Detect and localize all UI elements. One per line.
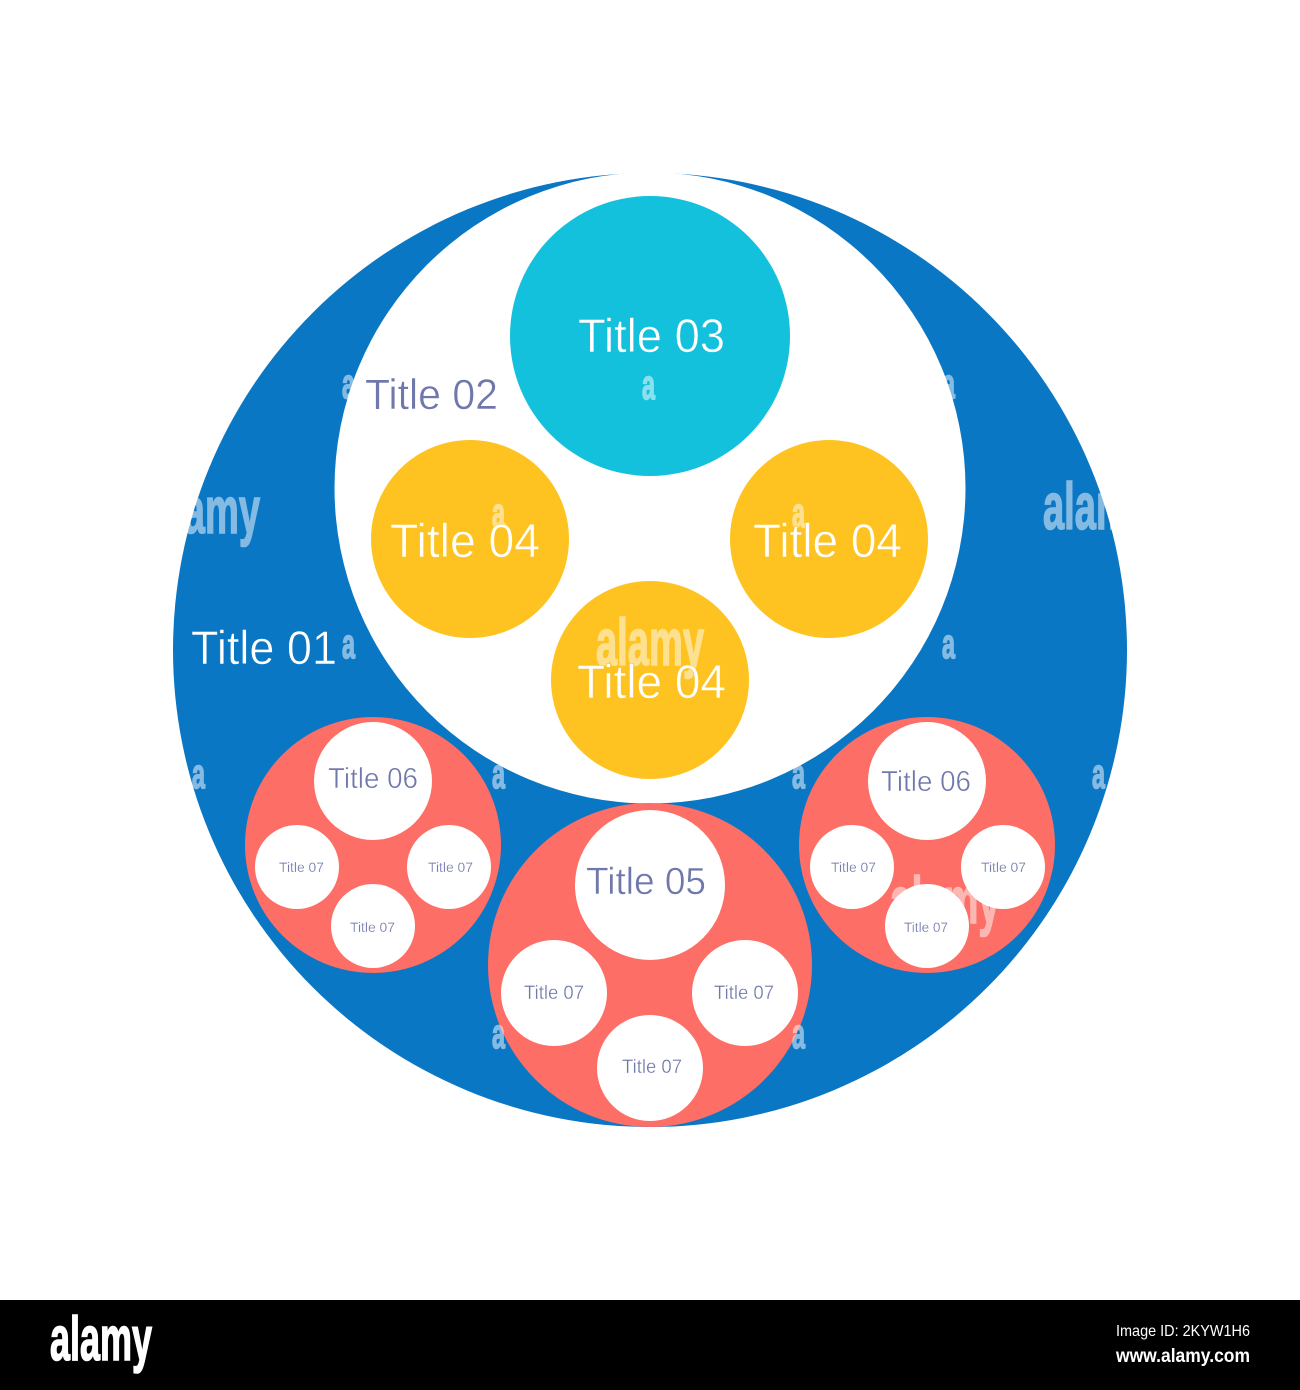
group: watermarks: a xyxy=(492,750,505,797)
group: Title 07 labels small: Title 07 xyxy=(831,859,876,875)
watermark behind white circles: alamy xyxy=(890,863,1000,937)
panel: white inner circle xyxy=(334,172,966,804)
label: Title 06 left: Title 06 xyxy=(328,763,418,795)
group: white circles right cluster xyxy=(810,722,1045,968)
group: Title 07 labels large: Title 07 xyxy=(714,983,774,1004)
group: watermarks: alamy xyxy=(596,605,704,679)
group: white circles left cluster xyxy=(255,722,491,968)
panel: outer blue circle xyxy=(173,173,1127,1127)
group: white circles centre cluster xyxy=(501,810,798,1121)
group: Title 07 labels large xyxy=(524,983,774,1078)
group: watermarks: a xyxy=(342,620,355,667)
label: Title 02: Title 02 xyxy=(365,371,498,419)
group: Title 07 labels small: Title 07 xyxy=(428,859,473,875)
group: watermarks: a xyxy=(192,750,205,797)
group: watermarks: a xyxy=(492,1010,505,1057)
footer url: www.alamy.com xyxy=(1115,1346,1250,1367)
group: Title 07 labels large: Title 07 xyxy=(622,1057,682,1078)
group: watermarks: a xyxy=(792,489,805,536)
label: Title 04 left: Title 04 xyxy=(390,514,540,567)
label: Title 04 right: Title 04 xyxy=(753,514,902,567)
group: red circles xyxy=(245,717,1055,1127)
group: watermarks: a xyxy=(492,489,505,536)
label: Title 06 right: Title 06 xyxy=(881,766,971,798)
label: Title 03: Title 03 xyxy=(578,309,725,362)
group: watermarks: a xyxy=(342,360,355,407)
group: watermarks: alamy xyxy=(152,473,260,547)
group: yellow circles xyxy=(371,440,928,779)
footer logo: alamy xyxy=(50,1305,152,1374)
group: watermarks: a xyxy=(642,361,655,408)
group: Title 07 labels small: Title 07 xyxy=(981,859,1026,875)
footer bar xyxy=(0,1300,1300,1390)
label: Title 01: Title 01 xyxy=(191,621,337,674)
group: watermarks: a xyxy=(942,360,955,407)
group: watermarks: alamy xyxy=(1043,469,1151,543)
group: Title 07 labels small: Title 07 xyxy=(904,919,948,935)
group: Title 07 labels small: Title 07 xyxy=(350,919,395,935)
label: Title 04 bottom: Title 04 xyxy=(577,655,726,708)
group: watermarks: a xyxy=(792,750,805,797)
group: Title 07 labels small xyxy=(279,859,1026,935)
label: Title 05: Title 05 xyxy=(586,861,706,903)
cyan circle xyxy=(510,196,790,476)
group: Title 07 labels small: Title 07 xyxy=(279,859,324,875)
group: watermarks: a xyxy=(942,620,955,667)
group: watermarks: a xyxy=(1092,750,1105,797)
group: watermarks xyxy=(152,360,1151,1057)
group: watermarks: a xyxy=(792,1010,805,1057)
group: Title 07 labels large: Title 07 xyxy=(524,983,584,1004)
footer image id: Image ID: 2KYW1H6 xyxy=(1116,1323,1250,1340)
